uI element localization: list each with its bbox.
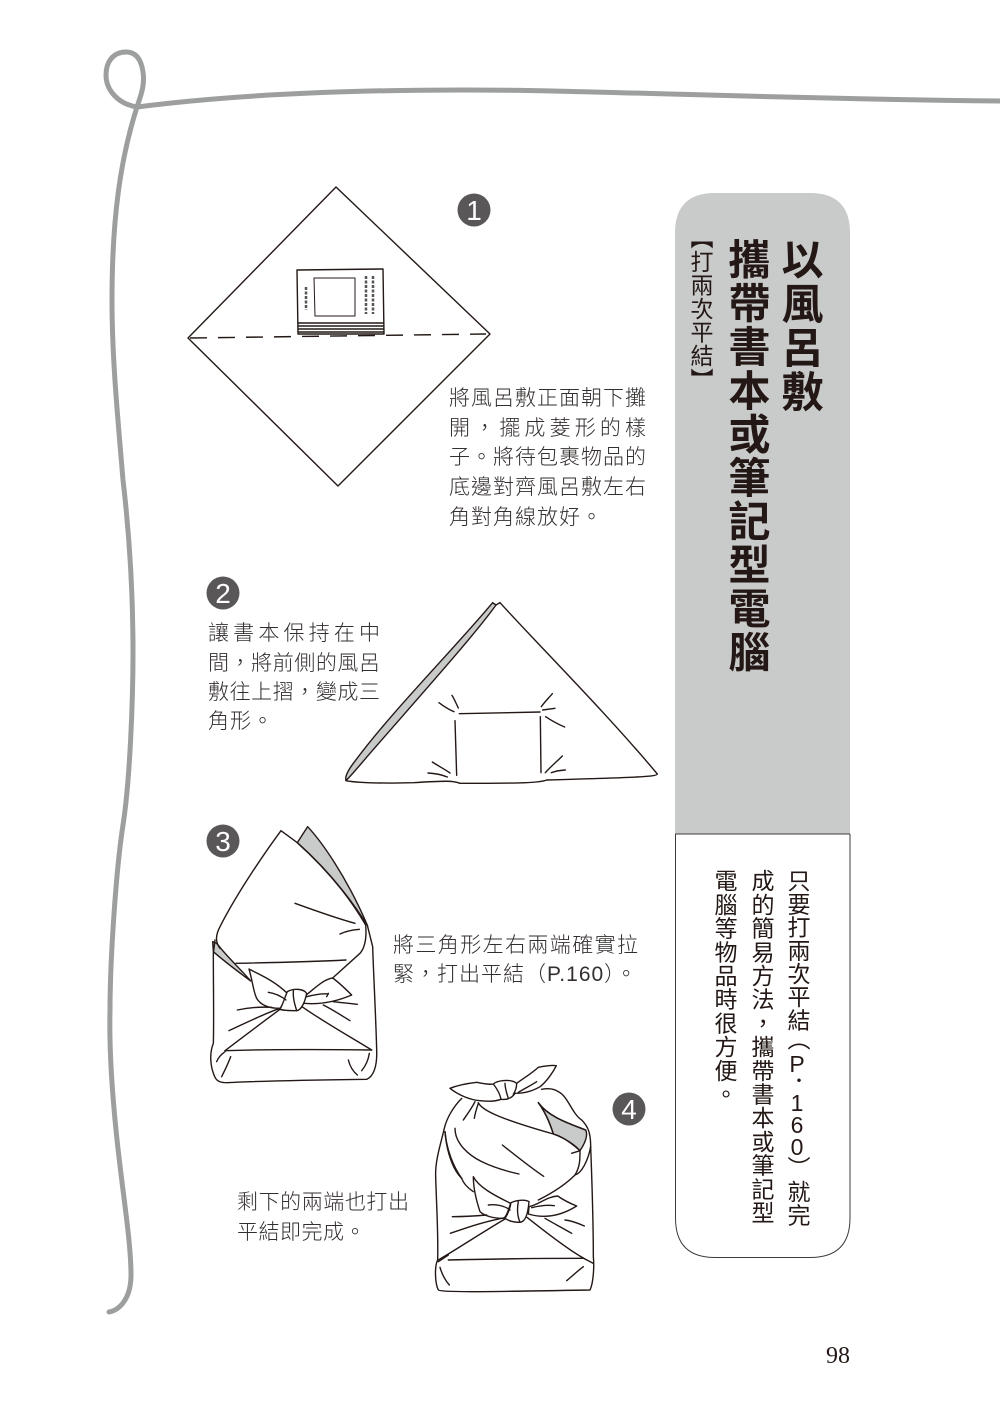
step 1 text: 底邊對齊風呂敷左右 <box>449 476 646 499</box>
step 4 text <box>237 1191 409 1244</box>
step 2 text <box>208 622 380 733</box>
page number: 98 <box>826 1343 850 1369</box>
title line 1: 以風呂敷 <box>776 238 823 414</box>
step 3 text: 緊，打出平結（P.160）。 <box>393 963 638 986</box>
panel: title and description: 成的簡易方法，攜帶書本或筆記型 <box>748 869 774 1224</box>
step 1 text: 開，擺成菱形的樣 <box>449 417 646 440</box>
icon: book <box>297 269 384 334</box>
number badge 1: 1 <box>466 195 482 226</box>
step 3 text: 將三角形左右兩端確實拉 <box>393 934 638 957</box>
step 2 text: 間，將前側的風呂 <box>208 652 380 675</box>
panel: title and description: 電腦等物品時很方便。 <box>711 869 737 1106</box>
panel background <box>675 193 850 1258</box>
number badge 4: 4 <box>621 1094 637 1125</box>
step 4 text: 剩下的兩端也打出 <box>237 1191 409 1214</box>
subtitle: 【打兩次平結】 <box>687 226 713 391</box>
step 1 text: 將風呂敷正面朝下攤 <box>449 387 646 410</box>
step 2 text: 敷往上摺，變成三 <box>208 681 380 704</box>
number badge 3: 3 <box>215 826 231 857</box>
step 1 text: 角對角線放好。 <box>449 506 603 529</box>
step 1 text <box>449 387 646 529</box>
step 1 text: 子。將待包裹物品的 <box>449 446 646 469</box>
step 4 text: 平結即完成。 <box>237 1221 366 1244</box>
step 2 text: 讓書本保持在中 <box>208 622 380 645</box>
description text: 只要打兩次平 結 （ P ． 160 ）就完 <box>784 869 810 1227</box>
panel: title and description <box>675 193 850 1258</box>
step 3 text <box>393 934 638 986</box>
title line 2: 攜帶書本或筆記型電腦 <box>723 238 770 674</box>
number badge 2: 2 <box>215 578 231 609</box>
step 2 text: 角形。 <box>208 710 274 733</box>
